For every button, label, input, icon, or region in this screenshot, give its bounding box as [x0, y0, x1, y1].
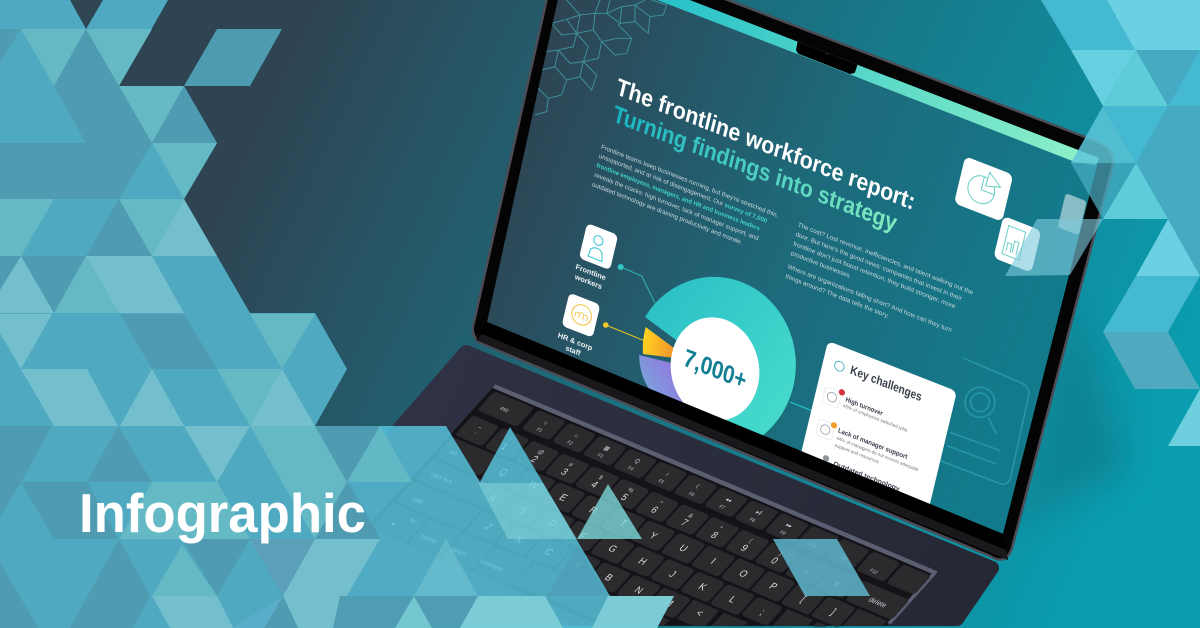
qwerty key row: Y [646, 531, 660, 542]
screen [487, 0, 1110, 581]
technology icon [822, 454, 830, 462]
shift key row [396, 482, 746, 628]
home key row: K [695, 582, 709, 593]
left triangle pattern [0, 0, 870, 628]
lower right chevrons [1103, 276, 1200, 332]
challenge: lack of manager support [816, 419, 918, 471]
donut chart [639, 277, 796, 453]
lower triangles [0, 539, 380, 628]
number key row: 1 [498, 442, 510, 452]
number key row: $ [597, 474, 605, 482]
bottom key row: option [450, 546, 469, 558]
qwerty key row: U [676, 543, 690, 555]
connector: frontline workers [621, 267, 655, 303]
label: HR and corp staff: staff [565, 343, 582, 358]
function key row: F2 [565, 440, 574, 447]
function key row: F3 [595, 453, 605, 460]
qwerty key row: Q [496, 467, 510, 479]
qwerty key row: O [736, 568, 750, 580]
home key row: H [635, 556, 649, 568]
keyboard [320, 386, 935, 628]
label: frontline workers: workers [573, 272, 603, 291]
lid lower strip [476, 334, 1008, 560]
pie card background [954, 156, 1013, 222]
qwerty key row: W [525, 479, 541, 492]
number key row: 6 [648, 505, 660, 516]
icon card: pie chart [954, 156, 1013, 222]
donut centre [670, 317, 760, 420]
bottom key row [372, 504, 668, 628]
top right triangles [1041, 0, 1136, 50]
number key row: @ [535, 449, 546, 456]
function key row: F11 [838, 555, 849, 563]
icon card: faded triangle [1058, 193, 1087, 235]
function key row: ◂◂ [723, 496, 734, 504]
qwerty key row: I [708, 557, 718, 567]
intro text right: frontline don't just boost retention; they build stronger, more [793, 241, 957, 311]
upper triangles [0, 29, 217, 313]
qwerty key row: tab [447, 448, 460, 457]
middle triangles [0, 314, 380, 539]
shift key row: V [572, 560, 585, 571]
icon card: HR and corp staff [562, 294, 600, 336]
top notch [70, 0, 103, 29]
panel background [802, 342, 956, 504]
function key row: F8 [747, 517, 757, 524]
function key row [478, 392, 930, 594]
facet group lower [0, 562, 38, 628]
shift key row: B [602, 572, 615, 584]
function key row: ☼ [541, 419, 551, 427]
intro text right [786, 222, 973, 332]
panel: key challenges [802, 342, 956, 504]
number key row: ) [777, 551, 784, 557]
function key row: Q [632, 458, 642, 465]
label: frontline workers: Frontline [575, 262, 607, 282]
qwerty key row: R [586, 505, 600, 517]
number key row [456, 416, 909, 619]
intro text left: frontline employees, managers, and HR and business leaders [596, 162, 761, 233]
title line one: The frontline workforce report: [614, 74, 918, 216]
number key row: ! [507, 437, 514, 443]
number key row: ( [747, 538, 754, 545]
translucent base [333, 426, 674, 628]
intro text left: unsupported, and at risk of disengagement. Our survey of 7,000 [598, 153, 768, 225]
home key row [416, 460, 826, 628]
function key row: F7 [717, 504, 726, 511]
shift key row: < [693, 608, 706, 619]
qwerty key row: E [556, 492, 570, 504]
bar card background [993, 216, 1041, 273]
translucent parallelogram [773, 539, 870, 596]
intro text left: reveals the cracks: high turnover, lack of manager support, and [594, 172, 760, 243]
number key row: 8 [708, 530, 720, 541]
intro line 1: Frontline teams keep businesses running, but they're stretched thin, [600, 144, 779, 219]
facet group upper [0, 29, 21, 62]
icon card: frontline workers [579, 223, 618, 270]
challenge: high turnover: 45% of employees switched jobs [842, 403, 908, 434]
challenge: high turnover [822, 386, 907, 432]
frontline card background [579, 223, 618, 270]
number key row: * [717, 525, 725, 532]
shift key row: shift [410, 496, 424, 506]
trackpad [429, 582, 570, 628]
function key row: F9 [778, 530, 787, 537]
shift key row: N [631, 585, 645, 596]
number key row: ^ [657, 500, 664, 507]
donut yellow segment [642, 327, 674, 358]
intro text right: door. But here's the good news: companies that invest in their [795, 231, 962, 302]
laptop base [258, 352, 992, 619]
challenge: lack of manager support: 44% of managers do not receive adequate [836, 435, 919, 473]
intro text right: Where are organizations falling short? And how can they turn [787, 264, 953, 334]
screen background [487, 0, 1099, 534]
home key row: caps lock [428, 471, 455, 486]
panel heading: Key challenges [849, 363, 923, 404]
number key row: = [829, 579, 842, 590]
top gradient band [657, 0, 1099, 165]
home key row: D [545, 518, 559, 530]
heading: Infographic: Infographic [79, 482, 366, 544]
notch [797, 34, 858, 73]
function key row: F1 [535, 427, 544, 434]
shift key row: C [541, 547, 555, 558]
home key row: G [605, 543, 619, 555]
right triangle pattern [1005, 0, 1200, 446]
search outline icon [940, 358, 1029, 484]
connector lines and dots [603, 264, 815, 412]
intro text right: productive businesses. [790, 250, 852, 280]
translucent quad over laptop corner [1005, 219, 1103, 276]
number key row: delete [866, 595, 889, 609]
number key row: ` [470, 432, 477, 438]
number key row: 0 [768, 556, 781, 567]
translucent apex triangle [577, 484, 642, 539]
function key row: ☼ [571, 432, 581, 440]
laptop shadow [1000, 290, 1130, 530]
number key row: ~ [476, 425, 484, 432]
laptop [347, 0, 1114, 627]
function key row: ▦ [602, 445, 612, 453]
number key row: 3 [558, 467, 570, 478]
number key row: - [800, 567, 811, 577]
number key row: 5 [618, 492, 631, 503]
camera [826, 52, 829, 54]
function key row: F6 [687, 491, 696, 498]
left base shape [0, 0, 380, 628]
challenge: lack of manager support: support and resources [834, 442, 880, 466]
number key row: # [567, 462, 575, 469]
translucent triangles over keyboard [333, 426, 870, 628]
title line two: Turning findings into strategy [610, 101, 900, 237]
home key row: S [515, 506, 529, 517]
shift key row: Z [482, 522, 495, 533]
home key row: L [726, 595, 739, 606]
bottom bezel [476, 322, 1008, 560]
turnover icon [822, 386, 842, 408]
function key row: ☾ [693, 483, 703, 491]
function key row: ▸‖ [754, 509, 763, 517]
keyboard well [367, 386, 935, 628]
facet group middle [0, 314, 52, 369]
hexagon line pattern [535, 0, 667, 115]
challenge: outdated technology: Outdated technology [833, 461, 900, 493]
number key row: 9 [738, 543, 750, 554]
function key row: F5 [656, 478, 666, 485]
bottom key row: ● [389, 521, 398, 528]
qwerty key row [436, 438, 886, 628]
function key row: F10 [807, 542, 819, 550]
shift key row: X [512, 534, 525, 546]
function key row: ♪ [664, 471, 671, 478]
icon card: bar chart [993, 216, 1041, 273]
number key row: & [686, 512, 695, 519]
right paragraph line 1: The cost? Lost revenue, inefficiencies, and talent walking out the [797, 222, 974, 297]
support icon [815, 418, 835, 441]
HR card background [562, 294, 600, 336]
number key row: 2 [528, 454, 540, 465]
label: HR and corp staff: HR & corp [557, 331, 593, 352]
number key row: % [626, 487, 636, 495]
intro text right: things around? The data tells the story. [785, 273, 890, 320]
screen content in tilted plane [558, 78, 1086, 504]
function key row: F4 [626, 465, 635, 472]
function key row: F12 [868, 568, 879, 576]
number key row: 4 [588, 480, 601, 491]
shift key row: M [661, 598, 676, 609]
home key row: J [666, 569, 678, 580]
home key row: F [576, 531, 589, 542]
floating rhombus [184, 29, 282, 86]
qwerty key row: T [616, 518, 629, 529]
challenge: high turnover: High turnover [845, 397, 884, 418]
qwerty key row: ] [828, 607, 838, 617]
function key row: esc [498, 405, 511, 414]
report title [615, 78, 914, 234]
qwerty key row: P [766, 581, 780, 593]
home key row: A [485, 493, 499, 504]
bottom key row: control [418, 533, 438, 545]
laptop lid [473, 0, 1113, 560]
challenge: lack of manager support: Lack of manager support [837, 428, 909, 461]
donut purple segment [639, 355, 696, 408]
donut teal segment [645, 277, 796, 453]
function key row: ▸▸ [784, 522, 795, 530]
info icon [834, 360, 844, 372]
bottom key row: command [478, 558, 505, 573]
qwerty key row: [ [798, 595, 808, 605]
donut value: 7,000+ [681, 344, 749, 395]
home key row: ; [757, 608, 767, 618]
bottom key row: fn [408, 517, 417, 525]
intro text left: outdated technology are draining productivity and morale. [591, 181, 743, 246]
challenge: outdated technology [822, 454, 901, 493]
keyboard rim [448, 386, 935, 624]
number key row: 7 [678, 518, 690, 529]
